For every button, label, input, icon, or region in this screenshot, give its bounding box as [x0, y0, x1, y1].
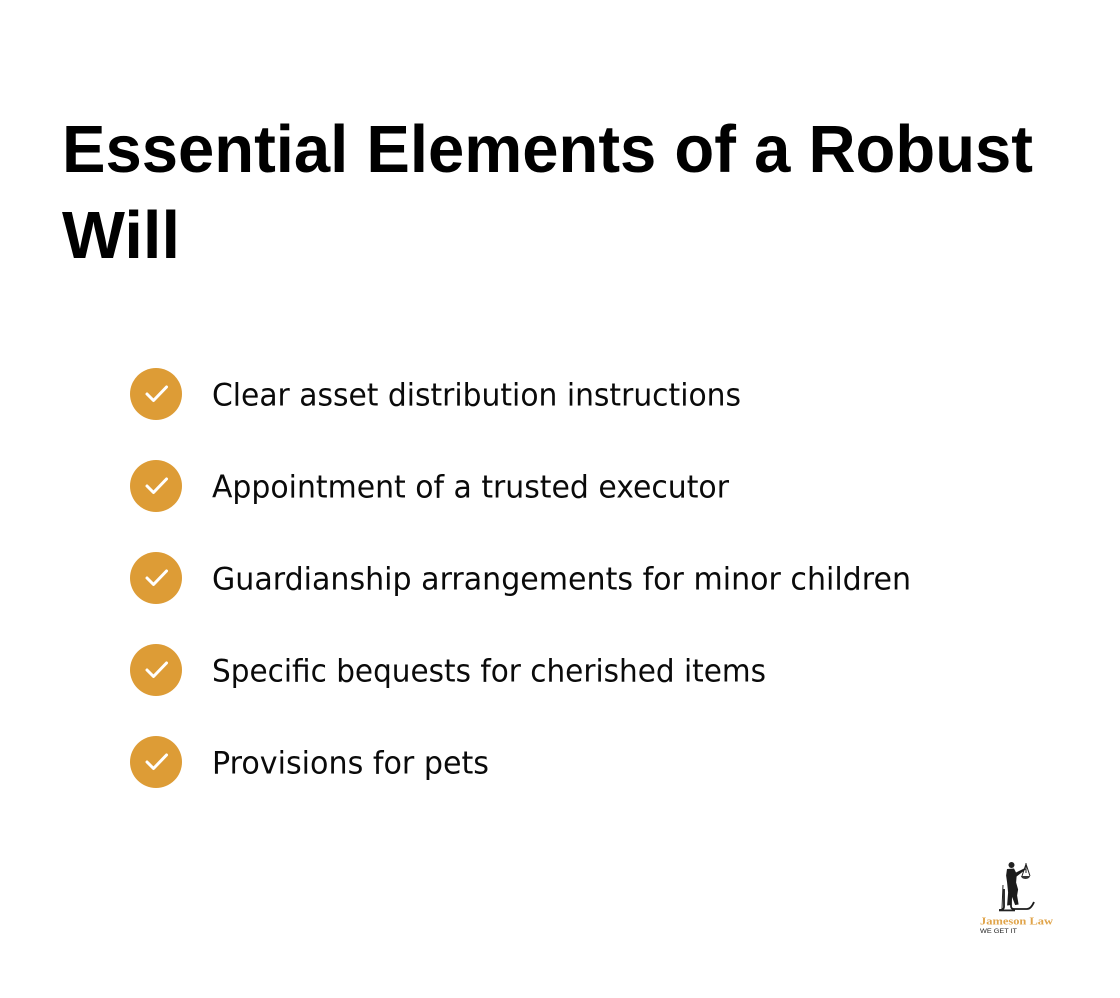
title: Will — [62, 198, 180, 273]
item: guardianship — [130, 552, 911, 604]
item: executor: Appointment of a trusted executor — [212, 470, 729, 506]
logo: Jameson Law — [980, 862, 1053, 935]
item: pets — [130, 736, 489, 788]
item: asset distribution — [130, 368, 741, 420]
title: Essential Elements of a Robust — [62, 112, 1033, 187]
item: bequests: Specific bequests for cherished items — [212, 654, 766, 690]
item: executor — [130, 460, 729, 512]
item: bequests — [130, 644, 766, 696]
logo tagline: WE GET IT — [980, 928, 1017, 935]
item: pets: Provisions for pets — [212, 746, 489, 782]
logo name: Jameson Law — [980, 916, 1053, 928]
item: guardianship: Guardianship arrangements for minor children — [212, 562, 911, 598]
item: asset distribution: Clear asset distribution instructions — [212, 378, 741, 414]
checklist — [130, 368, 911, 788]
title — [62, 112, 1033, 273]
icon: lady justice — [999, 862, 1034, 911]
